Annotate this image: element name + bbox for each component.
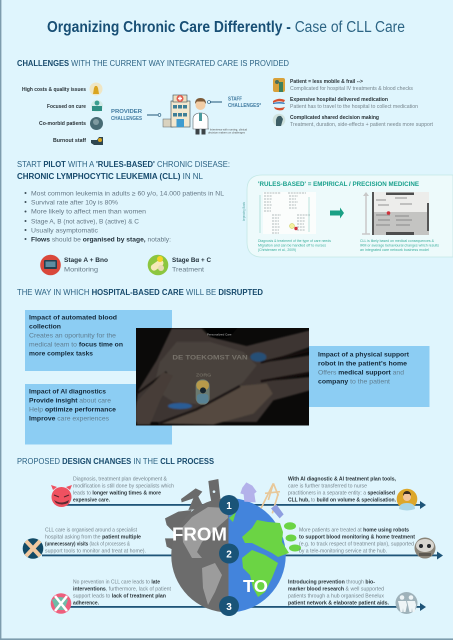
patient challenge list: Patient = less mobile & frail -->: [290, 79, 363, 85]
video still: future of care on a hand: Personalized Care: [207, 333, 232, 337]
callout: physical support robot: Impact of a physical support: [318, 352, 410, 358]
panel captions: IRM or average behavioural changes which results: [360, 244, 439, 248]
text: current prevention: interventions , furthermore, lack of patient: [73, 587, 172, 593]
footnote under doctor: * Interviews with nursing, clinical: [208, 128, 247, 132]
patient challenge list: Expensive hospital delivered medication: [290, 97, 388, 103]
heading: pilot: START PILOT WITH A 'RULES-BASED' CHRONIC DISEASE:: [17, 160, 230, 169]
video still: future of care on a hand: ZORG: [196, 373, 211, 379]
step markers: 3: [226, 602, 232, 613]
bullet list: CLL facts: Most common leukemia in adults ≥ 60 y/o, 14.000 patients in NL: [31, 190, 225, 197]
polluted half of globe: [171, 498, 228, 612]
bullet list: CLL facts: More likely to affect men than women: [31, 209, 147, 216]
text: new home robots: to support blood monitoring & home treatment: [299, 535, 415, 541]
callout: physical support robot: [309, 346, 430, 407]
text: new home robots: by a tele-monitoring service at the hub.: [299, 549, 387, 555]
callout: AI diagnostics: Provide insight about care: [29, 398, 112, 404]
panel captions: (Christensen et al., 2009): [258, 248, 296, 252]
label: stage B: Treatment: [172, 266, 204, 274]
panel captions: CLL is likely based on medical consequences &: [360, 239, 435, 243]
label: stage A: Stage A + Bno: [64, 257, 108, 264]
panel heading: 'RULES-BASED' = EMPIRICAL / PRECISION MEDICINE: [258, 181, 419, 188]
patient challenge list: Patient has to travel to the hospital to collect medication: [290, 104, 418, 110]
icon: doctor: [193, 98, 208, 134]
text: new prevention: Introducing prevention through bio-: [288, 580, 375, 586]
text: current hospital visits: (unnecessary) visits (lack of processes &: [45, 542, 131, 548]
connector lines and arrows: [42, 501, 443, 611]
video still: future of care on a hand: [133, 328, 310, 426]
callout: physical support robot: Offers medical support and: [318, 370, 405, 376]
text: current hospital visits: support tools to monitor and treat at home).: [45, 549, 146, 555]
text: current hospital visits: hospital asking from the patient multiple: [45, 535, 141, 541]
step markers: 2: [226, 550, 232, 560]
text: current prevention: No prevention in CLL care leads to late: [73, 580, 160, 586]
bullet list: CLL facts: Stage A, B (not active), B (active) & C: [31, 218, 139, 225]
text: current diagnosis: modification is still done by specialists which: [73, 484, 174, 490]
bullet list: CLL facts: Usually asymptomatic: [31, 227, 98, 234]
label: stage A: Monitoring: [64, 266, 99, 274]
provider challenges label and connector: PROVIDER: [111, 109, 142, 115]
icon: bandage x: [23, 538, 43, 559]
text: current hospital visits: [45, 528, 146, 555]
staff challenges label and connector: CHALLENGES*: [228, 103, 261, 109]
callout: automated blood collection: Impact of automated blood: [29, 314, 117, 322]
video title text: DE TOEKOMST VAN: [172, 355, 248, 362]
text: new AI hub: CLL hub, to build on volume & specialisation.: [288, 498, 397, 504]
callout: AI diagnostics: [25, 384, 172, 444]
text: new prevention: patient network & elaborate patient aids.: [288, 601, 390, 607]
patient challenge list: Complicated shared decision making: [290, 115, 379, 121]
icon: hospital: [163, 95, 190, 127]
footnote under doctor: decision makers on challenges: [208, 132, 246, 134]
precision medicine matrix thumbnail: [362, 192, 429, 235]
patient challenge list: Complicated for hospital IV treatments & blood checks: [290, 86, 414, 92]
provider challenge list: Burnout staff: [53, 138, 86, 144]
text: current diagnosis: [73, 477, 174, 504]
text: new AI hub: With AI diagnostic & AI treatment plan tools,: [288, 477, 397, 483]
provider challenges label and connector: CHALLENGES: [111, 116, 143, 122]
provider challenge list: [22, 82, 103, 145]
label: stage B: Stage Bα + C: [172, 257, 211, 264]
sidebar label: Improving Basis: [242, 202, 246, 221]
panel captions: Diagnosis & treatment of the type of care needs: [258, 239, 331, 243]
text: new AI hub: [288, 477, 397, 504]
label: from: FROM: [172, 524, 227, 544]
icon: patient group: [396, 592, 418, 614]
green half of globe: [228, 498, 301, 612]
arrow: empirical to precision: [330, 208, 344, 218]
heading: disrupted: THE WAY IN WHICH HOSPITAL-BASED CARE WILL BE DISRUPTED: [17, 288, 263, 297]
heading: design changes: PROPOSED DESIGN CHANGES IN THE CLL PROCESS: [17, 457, 215, 466]
staff challenges label and connector: [208, 96, 261, 109]
guideline flowchart thumbnail: [260, 192, 316, 234]
heading: pilot: [17, 160, 230, 181]
step markers: 1: [226, 501, 232, 512]
patient challenge list: [273, 78, 434, 128]
text: current prevention: support leads to lack of treatment plan: [73, 594, 166, 600]
panel captions: an integrated care network business model: [360, 248, 429, 252]
callout: AI diagnostics: Improve care experiences: [29, 416, 109, 422]
text: new home robots: (e.g. to track respect of treatment plan), supported: [299, 542, 414, 548]
callout: AI diagnostics: Impact of AI diagnostics: [29, 388, 107, 396]
callout: automated blood collection: medical team to focus time on: [29, 342, 123, 348]
icon: monitoring: [40, 255, 61, 275]
footnote under doctor: [208, 128, 247, 134]
icon: nurse avatar: [397, 489, 417, 510]
palm and fingers: [133, 329, 310, 422]
heading: pilot: CHRONIC LYMPHOCYTIC LEUKEMIA (CLL) IN NL: [17, 172, 204, 181]
icon: angry devil: [51, 485, 72, 507]
panel: rules-based medicine: [247, 175, 453, 257]
text: current diagnosis: Diagnosis, treatment plan development &: [73, 477, 168, 483]
callout: automated blood collection: more complex tasks: [29, 350, 94, 358]
bullet list: CLL facts: Survival rate after 10y is 80%: [31, 199, 118, 206]
provider challenge list: Co-morbid patients: [39, 121, 86, 127]
text: current diagnosis: leads to longer waiting times & more: [73, 491, 161, 497]
callout: physical support robot: robot in the patient's home: [318, 360, 408, 368]
text: new prevention: patients through a hub organised Benelux: [288, 594, 385, 600]
label: to: TO: [243, 576, 268, 596]
title: Organizing Chronic Care Differently - Case of CLL Care: [47, 19, 405, 36]
industrial silhouettes: [165, 479, 220, 550]
text: new home robots: More patients are treated at home using robots: [299, 528, 409, 534]
panel captions: [258, 239, 439, 252]
patient challenge list: Treatment, duration, side-effects + patient needs more support: [290, 122, 434, 128]
icon: robot head: [414, 538, 436, 558]
text: new AI hub: care is further transferred to nurse: [288, 484, 367, 490]
text: current hospital visits: CLL care is organised around a specialist: [45, 528, 138, 534]
label: stage A: [64, 257, 108, 274]
icon: treatment: [148, 255, 168, 275]
icons: research tower, wind turbines and solar panel: [240, 482, 284, 518]
label: stage B: [172, 257, 211, 274]
text: new prevention: [288, 580, 390, 607]
callout: physical support robot: company to the patient: [318, 378, 390, 386]
bullet list: CLL facts: Flows should be organised by stage, notably:: [31, 236, 171, 243]
text: new home robots: [299, 528, 415, 555]
text: current diagnosis: expensive care.: [73, 498, 111, 504]
bullet list: CLL facts: [24, 190, 225, 243]
text: current prevention: adherence.: [73, 601, 100, 607]
illustration: split globe from to: [165, 479, 301, 616]
text: new prevention: marker blood research & well supported: [288, 587, 384, 593]
text: new AI hub: practitioners in a separate entity: a specialised: [288, 491, 395, 497]
text: current prevention: [73, 580, 172, 607]
provider challenge list: Focused on cure: [47, 104, 86, 110]
callout: automated blood collection: Creates an oportunity for the: [29, 332, 117, 340]
staff challenges label and connector: STAFF: [228, 96, 242, 102]
panel captions: Migration and can be handled off to nurses: [258, 244, 326, 248]
heading: challenges: CHALLENGES WITH THE CURRENT WAY INTEGRATED CARE IS PROVIDED: [17, 59, 289, 68]
callout: automated blood collection: [25, 310, 172, 371]
step markers: [219, 495, 239, 616]
provider challenges label and connector: [111, 109, 161, 122]
callout: AI diagnostics: Help optimize performance: [29, 406, 117, 414]
provider challenge list: High costs & quality issues: [22, 87, 86, 93]
callout: automated blood collection: collection: [29, 324, 61, 330]
icon: pink x: [51, 593, 71, 614]
